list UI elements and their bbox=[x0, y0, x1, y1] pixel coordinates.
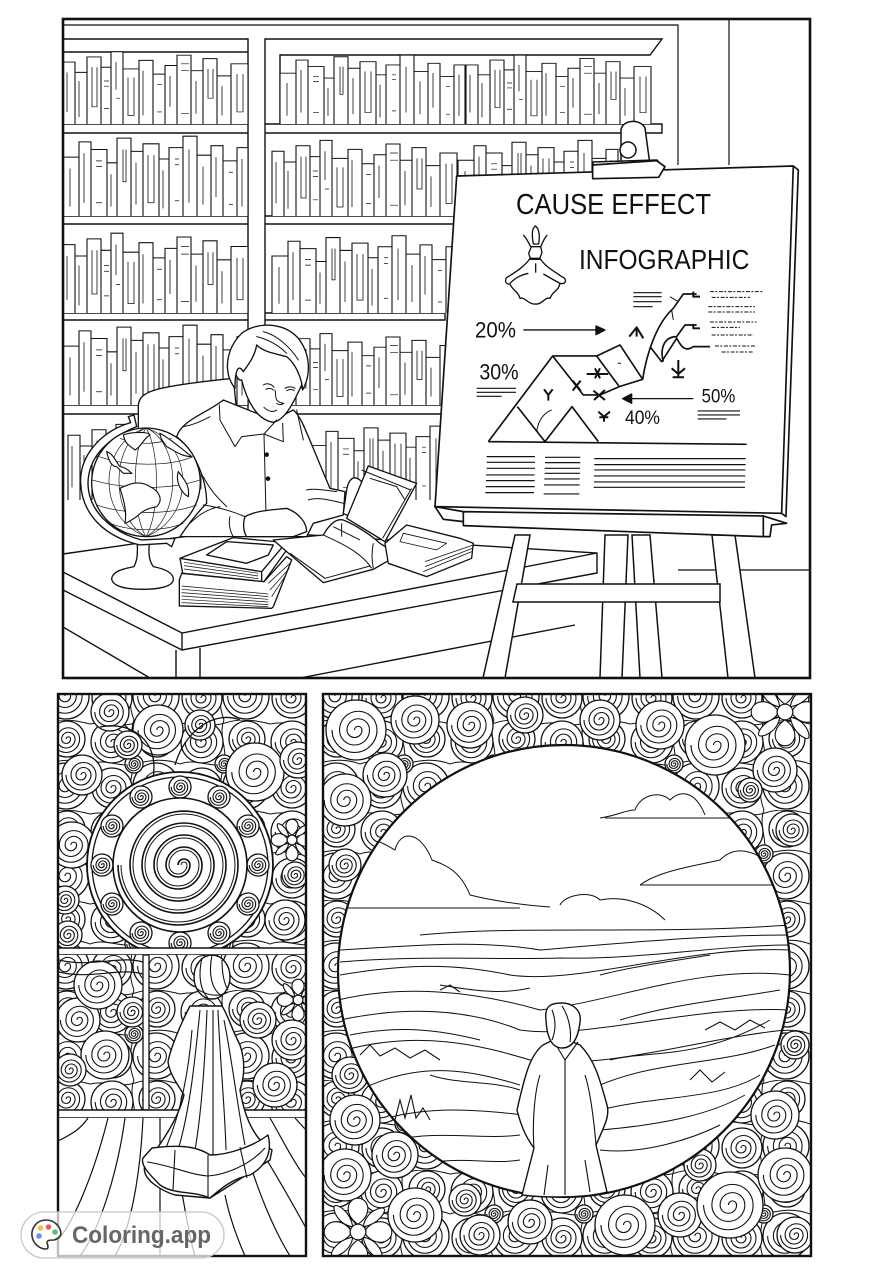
round landscape view bbox=[338, 745, 790, 1197]
upright book in hand bbox=[347, 466, 417, 542]
stand bbox=[112, 543, 173, 589]
globe (zoom coordinates) bbox=[81, 415, 200, 589]
open book bbox=[273, 520, 398, 583]
panel: scholar in library bbox=[63, 19, 810, 678]
stat 30%: 30% bbox=[479, 359, 519, 384]
frame: right panel bbox=[323, 694, 811, 1256]
cloak bbox=[144, 1006, 272, 1198]
panel: woman at swirl window bbox=[49, 693, 319, 1256]
board clip front bbox=[593, 161, 665, 179]
head bbox=[194, 955, 230, 999]
board bbox=[435, 166, 798, 517]
left bookcase bbox=[63, 39, 253, 510]
woman in long dress bbox=[142, 955, 272, 1198]
watermark text: Coloring.app bbox=[72, 1222, 211, 1249]
big spiral bbox=[87, 772, 273, 958]
standing figure in coat bbox=[517, 1003, 608, 1197]
bottle icon bbox=[506, 226, 565, 304]
arrow left bbox=[623, 394, 693, 403]
chart board bbox=[435, 161, 798, 537]
right bookcase bbox=[265, 39, 662, 500]
stat 50%: 50% bbox=[702, 387, 735, 408]
mountain chart bbox=[488, 294, 747, 444]
sky and clouds bbox=[345, 794, 790, 935]
scholar figure (zoom coordinates) bbox=[138, 325, 362, 537]
wall and room lines bbox=[63, 19, 810, 570]
desk bbox=[63, 530, 597, 678]
meridian ring bbox=[81, 415, 175, 547]
floorboards bbox=[58, 1118, 306, 1256]
icon: palette bbox=[32, 1220, 61, 1249]
window frame bbox=[54, 948, 319, 1118]
easel legs bbox=[483, 535, 755, 678]
hair bbox=[227, 325, 308, 390]
chart markers bbox=[544, 292, 700, 422]
decorative arcs bbox=[100, 717, 240, 800]
stat 40%: 40% bbox=[625, 408, 660, 429]
hand on book bbox=[244, 478, 362, 537]
grid lines bbox=[92, 428, 200, 537]
hem bbox=[142, 1135, 269, 1198]
scribble notes bbox=[708, 292, 763, 352]
heading: cause effect: CAUSE EFFECT bbox=[516, 189, 711, 221]
swirl border bbox=[319, 678, 819, 1266]
hills bbox=[338, 935, 790, 1165]
arrow right bbox=[523, 326, 605, 335]
swirl background bbox=[49, 693, 316, 949]
details: face, collar, shirt bbox=[183, 332, 343, 537]
continents bbox=[107, 432, 192, 523]
text lines above chart bbox=[477, 293, 740, 419]
book stack bbox=[179, 538, 292, 608]
panel: figure at round landscape bbox=[319, 678, 819, 1266]
watermark badge bbox=[21, 1212, 224, 1258]
text lines below chart bbox=[485, 457, 746, 494]
tree line bbox=[360, 985, 765, 1120]
easel clip bbox=[592, 120, 666, 169]
head bbox=[235, 343, 302, 422]
stat 20%: 20% bbox=[475, 318, 516, 343]
frame: top panel bbox=[63, 19, 810, 678]
torso and arms bbox=[177, 400, 345, 537]
heading: infographic: INFOGRAPHIC bbox=[579, 244, 749, 275]
book at right of desk bbox=[385, 525, 473, 577]
bottom ledge bbox=[435, 507, 787, 537]
chair bbox=[138, 378, 236, 428]
sphere bbox=[92, 428, 200, 537]
frame: left panel bbox=[58, 694, 306, 1256]
